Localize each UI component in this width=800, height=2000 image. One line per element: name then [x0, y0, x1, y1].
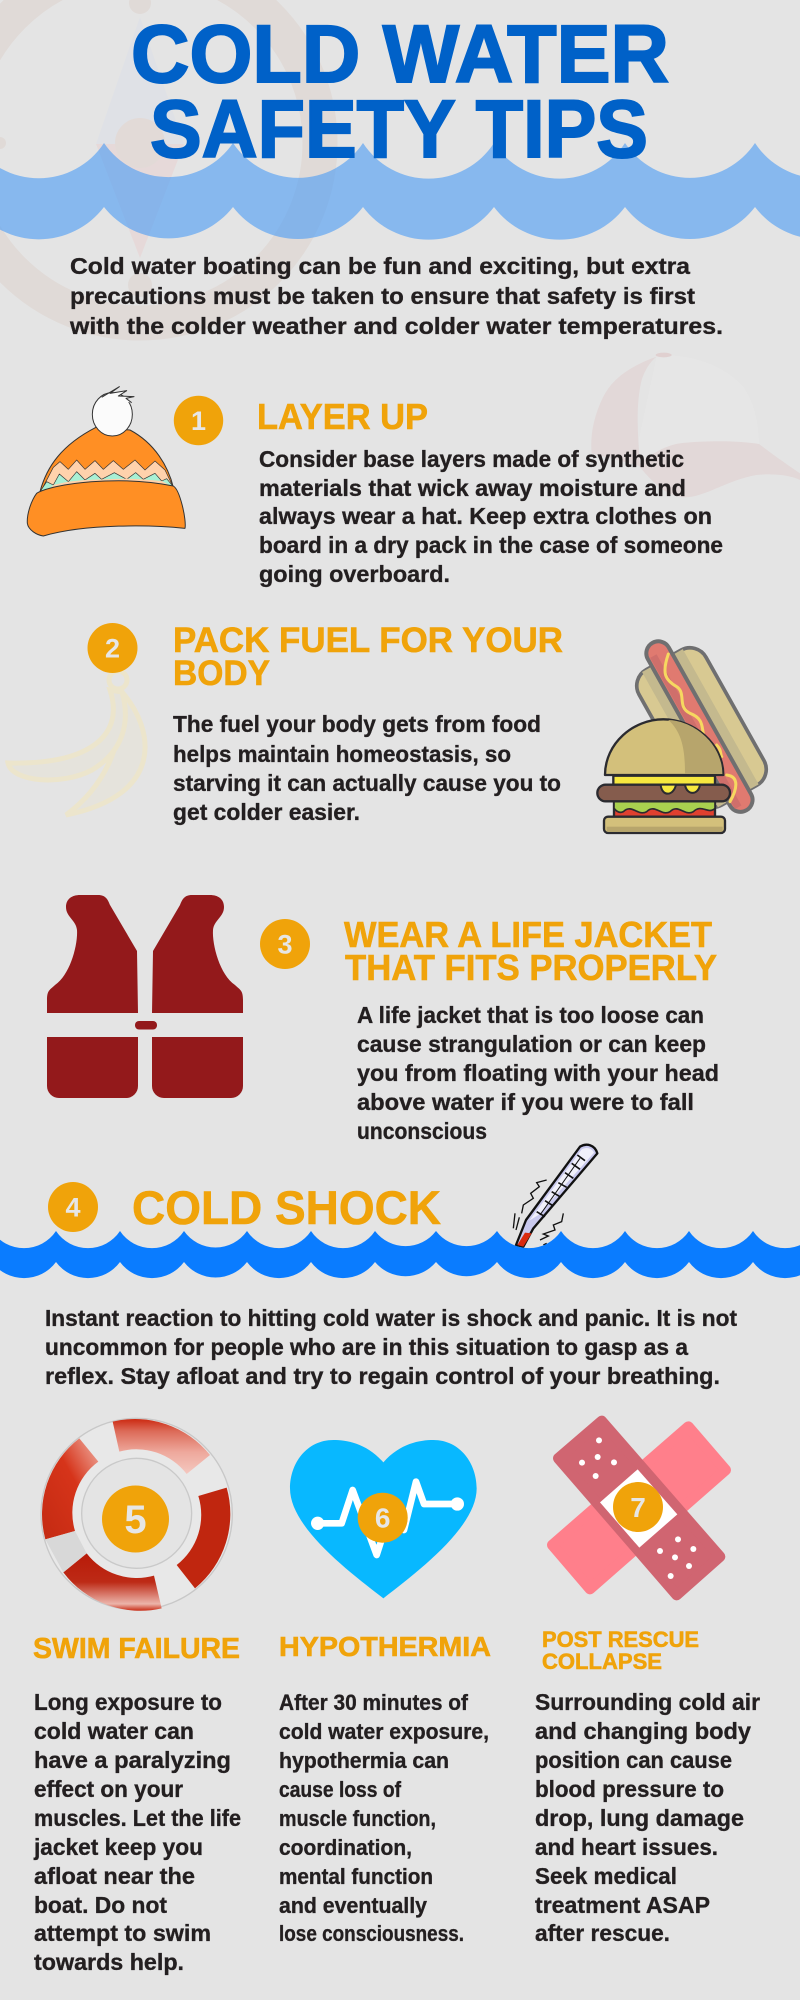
- text: life jacket: above water if you were to fall: [357, 1089, 694, 1115]
- text: hypothermia: cause loss of: [279, 1777, 401, 1802]
- heading: post rescue collapse: [542, 1627, 699, 1674]
- number badge 3: 3: [277, 930, 293, 960]
- icon: thermometer: [513, 1145, 597, 1247]
- text: post rescue collapse: blood pressure to: [535, 1776, 724, 1802]
- text: cold shock: [45, 1305, 737, 1389]
- text: layer up: materials that wick away moisture and: [259, 475, 686, 501]
- text: hypothermia: muscle function,: [279, 1806, 436, 1831]
- heading: life jacket: [344, 914, 717, 988]
- heading: hypothermia: HYPOTHERMIA: [279, 1631, 491, 1662]
- wave band: dark blue: [0, 1231, 800, 1278]
- text: pack fuel: [173, 711, 561, 825]
- icon: burger and hot dog: [597, 623, 781, 833]
- text: post rescue collapse: drop, lung damage: [535, 1805, 744, 1831]
- number badge 1: [174, 396, 223, 445]
- text: hypothermia: After 30 minutes of: [279, 1690, 468, 1715]
- text: swim failure: boat. Do not: [34, 1892, 167, 1918]
- top wave band: [0, 143, 800, 240]
- text: swim failure: attempt to swim: [34, 1920, 211, 1946]
- text: life jacket: unconscious: [357, 1118, 487, 1144]
- text: layer up: [259, 446, 723, 587]
- text: hypothermia: lose consciousness.: [279, 1921, 464, 1946]
- text: life jacket: you from floating with your head: [357, 1060, 719, 1086]
- icon: heart with pulse: [290, 1440, 477, 1598]
- watermark: bananas: [8, 671, 145, 815]
- watermark: cap: [591, 353, 800, 497]
- text: pack fuel: starving it can actually cause you to: [173, 770, 561, 796]
- text: pack fuel: The fuel your body gets from food: [173, 711, 541, 737]
- heading: swim failure: SWIM FAILURE: [33, 1633, 240, 1665]
- text: swim failure: jacket keep you: [33, 1834, 203, 1860]
- number badge 4: [48, 1182, 98, 1232]
- text: life jacket: cause strangulation or can keep: [357, 1031, 706, 1057]
- text: cold shock: Instant reaction to hitting cold water is shock and panic. It is not: [45, 1305, 737, 1331]
- text: swim failure: [33, 1689, 241, 1975]
- number badge 7: [613, 1482, 663, 1532]
- panel: layer up: [27, 387, 723, 587]
- text: post rescue collapse: treatment ASAP: [535, 1892, 710, 1918]
- heading: life jacket: THAT FITS PROPERLY: [345, 947, 717, 988]
- text: layer up: board in a dry pack in the case of someone: [259, 532, 723, 558]
- text: post rescue collapse: Seek medical: [535, 1863, 677, 1889]
- intro text: [69, 253, 723, 339]
- text: post rescue collapse: and changing body: [535, 1718, 751, 1744]
- icon: crossed bandages: [552, 1421, 726, 1595]
- text: post rescue collapse: and heart issues.: [535, 1834, 718, 1860]
- panel: pack fuel: [88, 621, 781, 833]
- number badge 5: [102, 1486, 169, 1552]
- text: post rescue collapse: after rescue.: [535, 1920, 670, 1946]
- text: hypothermia: [279, 1690, 489, 1946]
- panel: cold shock: [0, 1145, 800, 1389]
- text: layer up: always wear a hat. Keep extra clothes on: [259, 503, 712, 529]
- heading: pack fuel: [173, 621, 563, 693]
- text: swim failure: cold water can: [34, 1718, 194, 1744]
- icon: life ring: [41, 1418, 232, 1611]
- number badge 6: 6: [375, 1502, 390, 1534]
- text: swim failure: effect on your: [34, 1776, 183, 1802]
- text: post rescue collapse: position can cause: [535, 1747, 732, 1773]
- icon: life vest: [47, 895, 243, 1098]
- number badge 3: [260, 919, 310, 969]
- watermark: compass: [0, 0, 320, 323]
- panel: hypothermia: [279, 1440, 491, 1946]
- text: hypothermia: mental function: [279, 1864, 433, 1889]
- text: swim failure: have a paralyzing: [34, 1747, 231, 1773]
- text: hypothermia: coordination,: [279, 1835, 412, 1860]
- text: layer up: going overboard.: [259, 561, 450, 587]
- intro text: precautions must be taken to ensure that safety is first: [70, 283, 695, 309]
- text: layer up: Consider base layers made of synthetic: [259, 446, 684, 472]
- text: cold shock: reflex. Stay afloat and try to regain control of your breathing.: [45, 1363, 720, 1389]
- text: post rescue collapse: [535, 1689, 760, 1946]
- text: hypothermia: hypothermia can: [279, 1748, 449, 1773]
- heading: post rescue collapse: POST RESCUE: [542, 1627, 699, 1652]
- text: life jacket: A life jacket that is too loose can: [357, 1002, 704, 1028]
- intro text: with the colder weather and colder water temperatures.: [69, 313, 723, 339]
- heading: pack fuel: BODY: [173, 654, 270, 693]
- text: pack fuel: get colder easier.: [173, 799, 360, 825]
- heading: cold shock: COLD SHOCK: [132, 1181, 441, 1234]
- text: life jacket: [357, 1002, 719, 1144]
- text: post rescue collapse: Surrounding cold air: [535, 1689, 760, 1715]
- text: swim failure: towards help.: [34, 1949, 184, 1975]
- heading: life jacket: WEAR A LIFE JACKET: [344, 914, 712, 955]
- number badge 6: [358, 1493, 408, 1543]
- number badge 2: [88, 623, 138, 673]
- title: [131, 9, 669, 175]
- text: swim failure: Long exposure to: [34, 1689, 222, 1715]
- text: swim failure: muscles. Let the life: [34, 1805, 241, 1831]
- panel: swim failure: [33, 1418, 241, 1975]
- number badge 7: 7: [630, 1492, 646, 1523]
- number badge 4: 4: [65, 1192, 81, 1222]
- number badge 5: 5: [124, 1498, 147, 1542]
- heading: post rescue collapse: COLLAPSE: [542, 1649, 662, 1674]
- panel: life jacket: [47, 895, 719, 1144]
- text: cold shock: uncommon for people who are in this situation to gasp as a: [45, 1334, 689, 1360]
- heading: pack fuel: PACK FUEL FOR YOUR: [173, 621, 563, 660]
- text: pack fuel: helps maintain homeostasis, so: [173, 741, 511, 767]
- number badge 2: 2: [105, 634, 120, 664]
- number badge 1: 1: [191, 406, 206, 436]
- title: SAFETY TIPS: [150, 84, 648, 175]
- text: hypothermia: cold water exposure,: [279, 1719, 489, 1744]
- heading: layer up: LAYER UP: [257, 396, 428, 437]
- title: COLD WATER: [131, 9, 669, 100]
- icon: winter hat: [27, 387, 185, 536]
- panel: post rescue collapse: [535, 1421, 760, 1946]
- text: swim failure: afloat near the: [34, 1863, 195, 1889]
- text: hypothermia: and eventually: [279, 1893, 427, 1918]
- intro text: Cold water boating can be fun and exciting, but extra: [70, 253, 691, 279]
